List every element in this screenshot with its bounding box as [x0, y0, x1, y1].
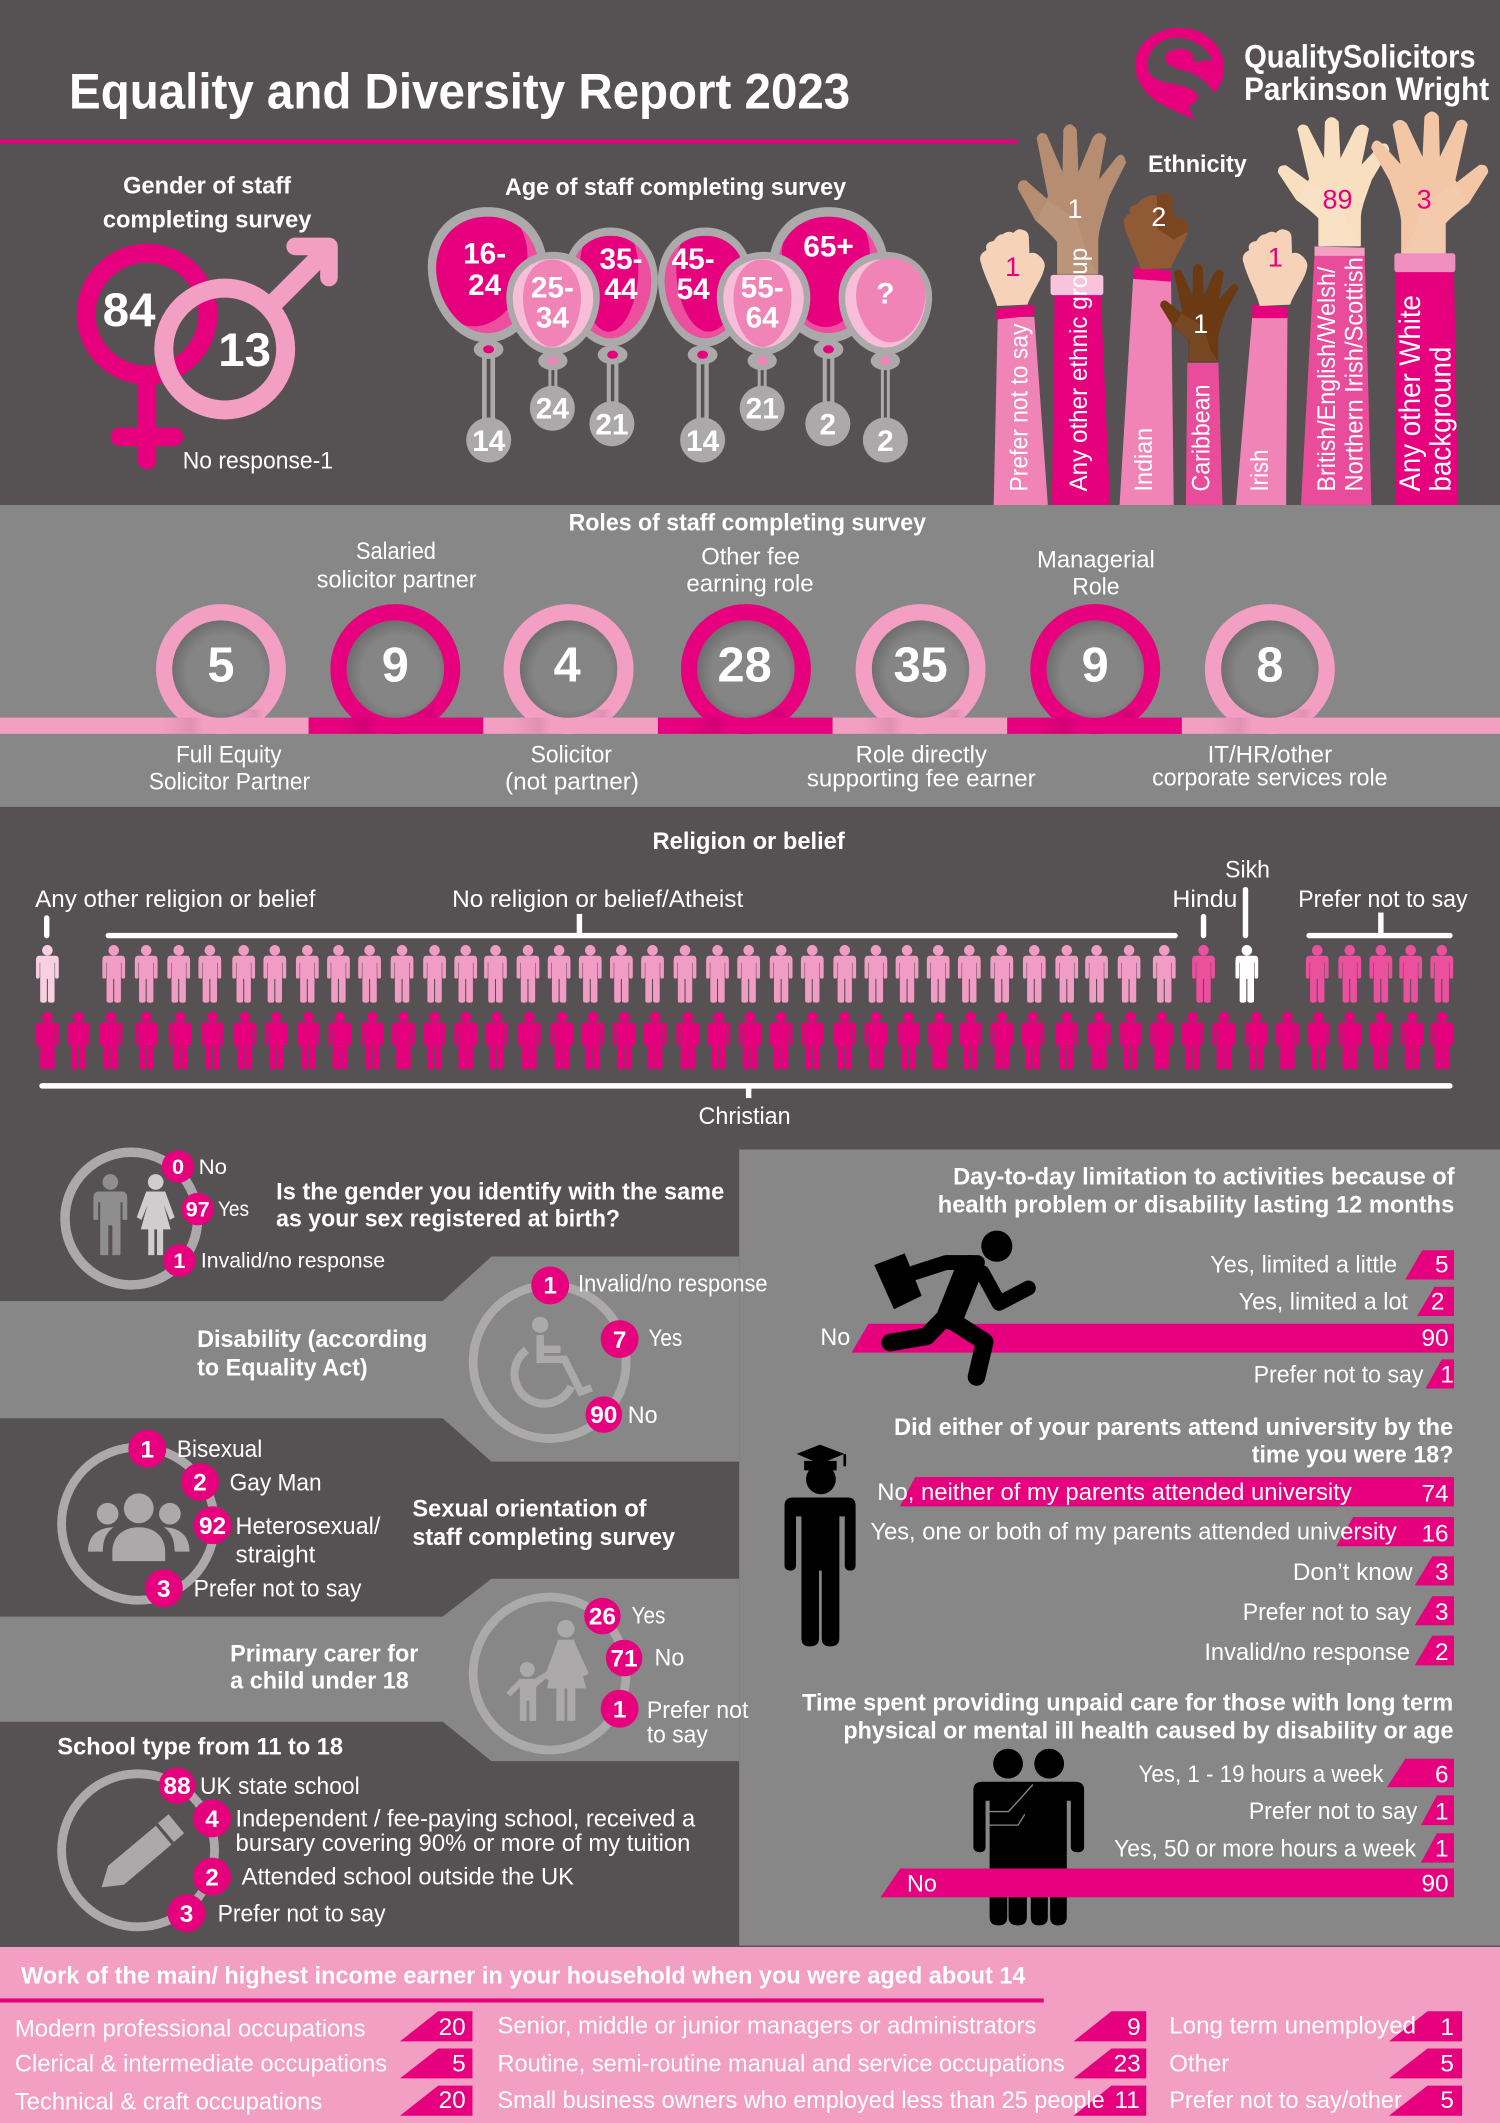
icon: pencil in ring [62, 1774, 215, 1927]
badge: 92 heterosexual: Heterosexual/ [236, 1513, 381, 1540]
heading: Is the gender you identify with the same [276, 1179, 724, 1206]
badge: 4 independent: bursary covering 90% or more of my tuition [236, 1830, 690, 1857]
icon: female symbol [86, 253, 208, 460]
badge: 2 outside UK: Attended school outside the UK [242, 1864, 574, 1891]
religion heading: Religion or belief [653, 828, 846, 855]
role labels: (not partner) [505, 768, 639, 795]
logo text [1244, 39, 1489, 107]
arm: British: 89 [1322, 184, 1353, 215]
bar: no 90: No [907, 1870, 937, 1897]
heading: Sexual orientation of [412, 1495, 647, 1522]
heading: Time spent providing unpaid care for those with long term [802, 1690, 1453, 1717]
badge: 1 prefer not: Prefer not [647, 1697, 749, 1724]
role labels: Managerial [1037, 546, 1155, 573]
badge: 7 yes: 7 [613, 1327, 626, 1354]
gender heading: Gender of staff [123, 173, 292, 200]
arm: Caribbean: Caribbean [1188, 385, 1216, 491]
arm: any other ethnic group: 1 [1067, 193, 1082, 224]
Christian label: Christian [699, 1103, 791, 1130]
role labels: Role directly [856, 741, 988, 768]
badge: 97 yes: 97 [186, 1197, 210, 1222]
heading: Primary carer for [230, 1640, 419, 1667]
logo [1135, 28, 1489, 120]
balloon: 55-64 [717, 252, 810, 431]
badge: 97 yes: Yes [218, 1198, 249, 1221]
badge: 90 no [586, 1396, 658, 1433]
balloon: 16-24: 24 [468, 269, 502, 302]
panel: school type [57, 1734, 696, 1932]
balloon: 25-34: 24 [536, 392, 569, 425]
panel: disability [197, 1266, 768, 1439]
title rule [0, 139, 1018, 144]
role labels: Solicitor [531, 741, 612, 768]
badge: 88 state [159, 1767, 360, 1804]
arm: any other White [1372, 112, 1487, 505]
panel: gender identity [65, 1150, 724, 1285]
people: any other religion [36, 945, 59, 1003]
balloon: 35-44: 35- [599, 243, 642, 276]
bar: 1-19 hours: Yes, 1 - 19 hours a week [1139, 1761, 1384, 1788]
balloon: 35-44: 44 [604, 273, 638, 306]
people: prefer not to say [1306, 945, 1453, 1003]
ring: salaried partner [337, 612, 452, 734]
gender heading [103, 173, 312, 233]
value: male: 13 [218, 324, 271, 377]
row: modern professional: Modern professional occupations [15, 2015, 366, 2042]
heading rule [0, 1998, 1044, 2002]
balloon: 65+ [769, 201, 888, 446]
bar: limited a lot: 2 [1431, 1288, 1445, 1315]
row: clerical: Clerical & intermediate occupations [15, 2051, 387, 2078]
balloon: 25-34 [506, 252, 600, 431]
balloon: 16-24: 14 [472, 425, 506, 458]
balloon: no answer: ? [876, 277, 894, 310]
arm: Irish [1236, 229, 1307, 505]
badge: 1 bisexual: 1 [141, 1437, 154, 1464]
badge: 92 heterosexual: 92 [199, 1513, 226, 1540]
role labels [149, 538, 1388, 795]
badge: 71 no: 71 [611, 1646, 638, 1673]
row: modern professional [15, 2011, 472, 2042]
bar: neither parent: 74 [1421, 1481, 1449, 1508]
roles band [0, 505, 1500, 807]
heading: as your sex registered at birth? [276, 1206, 620, 1233]
icon: two people embracing [973, 1749, 1084, 1925]
bar: 50 or more hours: 1 [1435, 1835, 1449, 1862]
badge: 92 heterosexual: straight [236, 1541, 316, 1568]
row: clerical: 5 [452, 2051, 466, 2078]
bar: limited a little: 5 [1435, 1252, 1449, 1279]
heading: time you were 18? [1252, 1441, 1453, 1468]
arm: prefer not to say [980, 229, 1048, 505]
arm: Indian: 2 [1151, 201, 1166, 232]
badge: 26 yes: Yes [632, 1602, 665, 1629]
role labels: Role [1072, 573, 1120, 600]
badge: 71 no [606, 1640, 684, 1676]
panel: religion [35, 828, 1468, 1130]
heading: a child under 18 [230, 1667, 409, 1694]
bar: prefer not: Prefer not to say [1249, 1798, 1418, 1825]
heading [894, 1414, 1453, 1468]
panel: parents university [785, 1414, 1454, 1666]
people: Hindu [1192, 945, 1215, 1003]
badge: 1 invalid: 1 [543, 1273, 557, 1300]
bar: prefer not: Prefer not to say [1243, 1599, 1412, 1626]
balloon: 16-24: 16- [463, 237, 506, 270]
row: other: Other [1169, 2051, 1229, 2078]
bar: no 90: 90 [1421, 1870, 1449, 1897]
religion labels: Hindu [1172, 886, 1237, 913]
row: senior managers: Senior, middle or junior managers or administrators [498, 2013, 1036, 2040]
balloon: 25-34: 25- [531, 271, 574, 304]
ethnicity heading: Ethnicity [1148, 151, 1247, 178]
badge: 71 no: No [655, 1644, 684, 1671]
heading: Did either of your parents attend university by the [894, 1414, 1453, 1441]
bar: prefer not: 1 [1440, 1361, 1454, 1388]
balloon: 65+: 65+ [803, 231, 854, 264]
badge: 26 yes: 26 [589, 1604, 616, 1631]
title: Equality and Diversity Report 2023 [69, 63, 850, 119]
bar: 50 or more hours: Yes, 50 or more hours a week [1114, 1835, 1417, 1862]
badge: 3 prefer not: Prefer not to say [218, 1900, 386, 1927]
balloon: 45-54: 14 [686, 425, 720, 458]
balloon: 55-64: 64 [746, 302, 779, 335]
badge: 1 invalid [531, 1266, 768, 1304]
role labels: Solicitor Partner [149, 768, 310, 795]
balloon: 16-24 [420, 200, 547, 463]
no response note: No response-1 [183, 447, 333, 474]
icon: group in ring [62, 1447, 215, 1600]
bar: no 90 [820, 1324, 1454, 1353]
balloon: 55-64: 21 [746, 392, 779, 425]
row: long term unemployed: Long term unemployed [1169, 2013, 1416, 2040]
ribbon stripe [0, 718, 1500, 734]
ring: corporate services: 8 [1256, 639, 1283, 693]
row: other: 5 [1440, 2051, 1454, 2078]
balloon: 45-54 [658, 221, 753, 463]
bar: prefer not: Prefer not to say [1254, 1361, 1424, 1388]
icon: wheelchair in ring [473, 1286, 626, 1439]
badge: 1 invalid: Invalid/no response [201, 1249, 385, 1272]
arm: prefer not to say: Prefer not to say [1006, 323, 1034, 491]
icon: running person with briefcase [874, 1231, 1028, 1377]
panel: ethnicity [980, 112, 1487, 505]
roles heading: Roles of staff completing survey [569, 510, 926, 537]
people: no religion [102, 945, 1176, 1003]
badge: 3 prefer not: 3 [157, 1576, 171, 1603]
icon: graduate [785, 1445, 856, 1646]
badge: 1 prefer not [601, 1690, 749, 1749]
row: small business: 11 [1115, 2087, 1140, 2114]
arm: Caribbean: 1 [1193, 308, 1208, 339]
badge: 0 no [162, 1150, 227, 1183]
heading [938, 1164, 1455, 1218]
bar: limited a lot: Yes, limited a lot [1239, 1288, 1408, 1315]
badge: 4 independent [193, 1799, 696, 1857]
arm: any other White: Any other White [1394, 295, 1427, 491]
arm: prefer not to say: 1 [1005, 251, 1020, 282]
badge: 3 prefer not [145, 1569, 362, 1607]
badge: 1 bisexual: Bisexual [177, 1436, 262, 1463]
logo text: QualitySolicitors [1244, 39, 1476, 75]
balloon: no answer: 2 [877, 425, 894, 458]
heading [230, 1640, 419, 1694]
role labels: corporate services role [1152, 764, 1388, 791]
icon: adult and child in ring [473, 1597, 626, 1750]
heading: health problem or disability lasting 12 months [938, 1191, 1454, 1218]
badge: 3 prefer not [168, 1894, 386, 1932]
bar: invalid: Invalid/no response [1204, 1639, 1410, 1666]
row: technical: 20 [439, 2087, 466, 2114]
religion labels: No religion or belief/Atheist [452, 886, 743, 913]
arm: Irish: 1 [1268, 242, 1283, 273]
badge: 1 invalid: Invalid/no response [578, 1271, 768, 1298]
ring: corporate services [1212, 612, 1327, 734]
arm: British: British/English/Welsh/ [1313, 267, 1341, 491]
balloon: 65+: 2 [820, 409, 836, 442]
brackets [39, 887, 1453, 1098]
badge: 1 prefer not: to say [647, 1722, 709, 1749]
row: senior managers: 9 [1127, 2014, 1141, 2041]
balloon: 45-54: 45- [672, 243, 715, 276]
panel: household income earner [0, 1947, 1500, 2123]
badge: 3 prefer not: Prefer not to say [194, 1575, 362, 1602]
gender heading: completing survey [103, 206, 312, 233]
logo mark [1135, 28, 1224, 120]
badge: 2 outside UK: 2 [205, 1864, 219, 1891]
pink band [0, 1947, 1500, 2123]
bar: one or both: 16 [1421, 1520, 1449, 1547]
arm: Irish: Irish [1246, 450, 1274, 491]
badge: 3 prefer not: 3 [180, 1901, 193, 1928]
icon: male symbol [164, 246, 329, 410]
panel: age [420, 174, 932, 463]
bar: one or both: Yes, one or both of my parents attended university [870, 1518, 1397, 1545]
arm: British: Northern Irish/Scottish [1341, 257, 1369, 491]
bar: prefer not: 3 [1435, 1599, 1449, 1626]
badge: 2 outside UK [193, 1858, 574, 1896]
badge: 4 independent: 4 [205, 1806, 219, 1833]
ring: solicitor [510, 612, 625, 734]
grey panels backdrop [0, 1150, 1500, 1946]
icon: man and woman in ring [65, 1152, 198, 1285]
badge: 97 yes [181, 1193, 249, 1225]
row: routine: Routine, semi-routine manual and service occupations [498, 2051, 1065, 2078]
balloon: no answer [839, 252, 932, 463]
heading: to Equality Act) [197, 1355, 368, 1382]
arm: any other ethnic group [1019, 125, 1125, 505]
panel: unpaid care [802, 1690, 1454, 1925]
ring: managerial [1037, 612, 1152, 734]
religion labels: Any other religion or belief [35, 886, 316, 913]
heading [276, 1179, 724, 1233]
row: prefer not: 5 [1440, 2087, 1454, 2114]
balloon: 55-64: 55- [741, 271, 784, 304]
role labels: Salaried [356, 538, 436, 565]
badge: 1 invalid: 1 [173, 1248, 185, 1273]
badge: 0 no: 0 [172, 1154, 184, 1179]
heading: Day-to-day limitation to activities because of [953, 1164, 1455, 1191]
arm: British [1279, 118, 1388, 505]
ring: full equity partner [162, 612, 278, 734]
row: long term unemployed: 1 [1440, 2014, 1454, 2041]
badge: 90 no: No [628, 1402, 658, 1429]
bar: no 90 [881, 1868, 1454, 1897]
religion labels [35, 856, 1468, 913]
heading: physical or mental ill health caused by disability or age [843, 1717, 1453, 1744]
heading: Disability (according [197, 1326, 427, 1353]
religion labels: Sikh [1225, 856, 1270, 883]
ring: other fee earning [688, 612, 803, 734]
badge: 1 invalid [163, 1244, 385, 1277]
heading: School type from 11 to 18 [57, 1734, 343, 1761]
row: prefer not: Prefer not to say/other [1169, 2087, 1402, 2114]
balloon: 35-44: 21 [595, 409, 628, 442]
row: small business: Small business owners who employed less than 25 people [498, 2087, 1105, 2114]
bar: don't know: 3 [1435, 1559, 1449, 1586]
badge: 2 gay man: Gay Man [230, 1470, 322, 1497]
role labels: Full Equity [176, 741, 282, 768]
bar: limited a little: Yes, limited a little [1210, 1252, 1397, 1279]
role labels: solicitor partner [317, 567, 477, 594]
badge: 1 bisexual [128, 1430, 262, 1468]
panel: sexual orientation [62, 1430, 675, 1607]
bar: 1-19 hours: 6 [1435, 1761, 1449, 1788]
value: female: 84 [103, 284, 156, 337]
badge: 90 no: 90 [590, 1402, 617, 1429]
bar: invalid: 2 [1435, 1639, 1449, 1666]
heading [802, 1690, 1453, 1744]
row: other [1169, 2049, 1462, 2078]
badge: 92 heterosexual [194, 1506, 381, 1568]
badge: 88 state: 88 [164, 1773, 191, 1800]
bar: neither parent: No, neither of my parents attended university [877, 1479, 1353, 1506]
badge: 26 yes [584, 1598, 665, 1634]
balloon: 35-44 [563, 221, 658, 446]
badge: 7 yes: Yes [648, 1325, 682, 1352]
badge: 1 prefer not: 1 [613, 1696, 626, 1723]
ring: managerial: 9 [1082, 639, 1109, 693]
badge: 88 state: UK state school [200, 1773, 360, 1800]
arm: Indian [1120, 193, 1188, 505]
heading: staff completing survey [412, 1524, 675, 1551]
row: technical [15, 2086, 472, 2116]
badge: 7 yes [601, 1320, 682, 1358]
age heading: Age of staff completing survey [505, 174, 847, 201]
badge: 0 no: No [199, 1156, 227, 1179]
role labels: supporting fee earner [807, 766, 1036, 793]
people: Christian [36, 1012, 1453, 1069]
arm: any other ethnic group: Any other ethnic group [1065, 248, 1093, 491]
arm: Indian: Indian [1130, 428, 1158, 491]
ring: role supporting fee earner [862, 612, 977, 734]
arm: any other White: background [1425, 347, 1458, 491]
bar: don't know: Don’t know [1293, 1559, 1413, 1586]
heading [412, 1495, 675, 1551]
balloon: 45-54: 54 [677, 273, 710, 306]
ring: other fee earning: 28 [717, 639, 772, 693]
panel: gender [86, 173, 333, 474]
badge: 4 independent: Independent / fee-paying school, received a [236, 1805, 696, 1832]
panel: primary carer [230, 1597, 749, 1750]
bar: no 90: No [820, 1324, 850, 1351]
ring: salaried partner: 9 [382, 639, 409, 693]
badge: 2 gay man [181, 1463, 322, 1501]
row: modern professional: 20 [439, 2014, 466, 2041]
arm: any other White: 3 [1417, 184, 1432, 215]
balloon: 25-34: 34 [536, 302, 569, 335]
ring: full equity partner: 5 [207, 639, 234, 693]
religion labels: Prefer not to say [1298, 886, 1468, 913]
ring: role supporting fee earner: 35 [893, 639, 948, 693]
heading [197, 1326, 427, 1382]
ring: solicitor: 4 [554, 639, 581, 693]
arm: Caribbean [1161, 265, 1237, 505]
panel: day-to-day limitation [820, 1164, 1455, 1388]
badge: 2 gay man: 2 [193, 1470, 207, 1497]
panel: roles [0, 505, 1500, 807]
bar: prefer not: 1 [1435, 1799, 1449, 1826]
heading: Work of the main/ highest income earner in your household when you were aged about 14 [21, 1963, 1026, 1990]
bar: don't know [1293, 1556, 1454, 1586]
row: technical: Technical & craft occupations [15, 2088, 322, 2115]
role labels: Other fee [701, 544, 800, 571]
bar: no 90: 90 [1421, 1325, 1449, 1352]
row: routine: 23 [1114, 2051, 1141, 2078]
role labels: earning role [686, 571, 814, 598]
role labels: IT/HR/other [1208, 741, 1332, 768]
people: Sikh [1235, 945, 1258, 1003]
